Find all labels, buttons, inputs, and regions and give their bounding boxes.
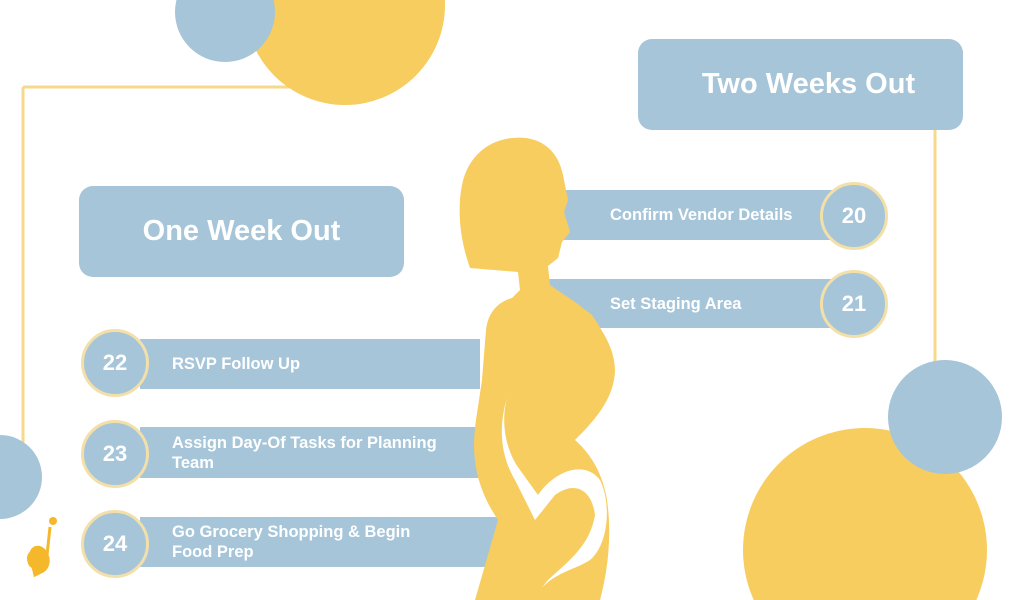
task bar 20 [560, 190, 835, 240]
task bar 24: Food Prep [172, 543, 254, 561]
number 21 [820, 270, 888, 338]
number 20: 20 [842, 203, 866, 228]
task bar 21 [540, 279, 835, 328]
heading: Two Weeks Out: Two Weeks Out [702, 68, 915, 100]
task bar 24 [140, 517, 510, 567]
number 24 [81, 510, 149, 578]
task bar 23: Assign Day-Of Tasks for Planning [172, 434, 437, 452]
number 24: 24 [103, 531, 127, 556]
task bar 23 [140, 427, 485, 478]
task bar 21: Set Staging Area [610, 294, 741, 312]
icon: logo elephant [27, 517, 57, 577]
number 20 [820, 182, 888, 250]
number 22 [81, 329, 149, 397]
number 23: 23 [103, 441, 127, 466]
number 22: 22 [103, 350, 127, 375]
number 21: 21 [842, 291, 866, 316]
heading: One Week Out [79, 186, 404, 277]
task bar 23: Team [172, 454, 214, 472]
heading: One Week Out: One Week Out [143, 215, 340, 247]
task bar 20: Confirm Vendor Details [610, 206, 792, 224]
number 23 [81, 420, 149, 488]
silhouette: pregnant woman [460, 138, 615, 600]
heading: Two Weeks Out [638, 39, 963, 130]
task bar 24: Go Grocery Shopping & Begin [172, 523, 410, 541]
task bar 22: RSVP Follow Up [172, 355, 300, 373]
task bar 22 [140, 339, 480, 389]
